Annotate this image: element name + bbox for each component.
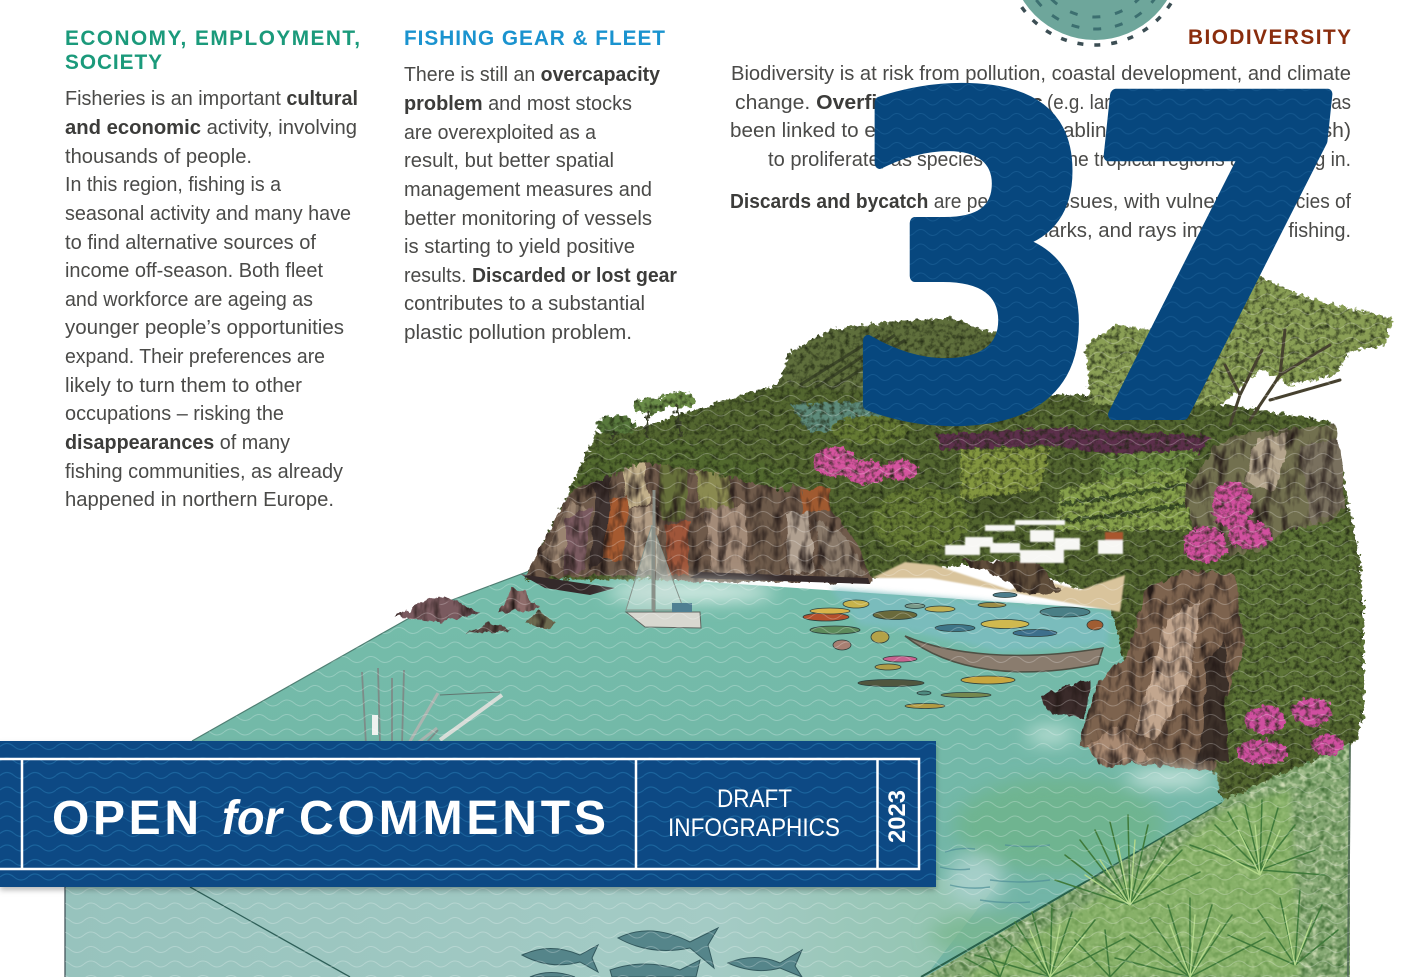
text block: economy column: thousands of people. (65, 145, 252, 168)
heading: biodiversity: BIODIVERSITY (1188, 26, 1351, 49)
moored boats (803, 592, 1103, 708)
text block: fishing gear column: plastic pollution problem. (404, 321, 632, 344)
beach (872, 562, 1125, 612)
banner title: OPEN (52, 792, 199, 845)
text block: fishing gear column: contributes to a substantial (404, 292, 645, 315)
fish school (522, 928, 802, 977)
right foliage (1230, 520, 1364, 735)
text block: fishing gear column: management measures and (404, 178, 652, 201)
green cliff top (570, 438, 800, 492)
big number 37: 7 (1045, 8, 1367, 518)
sailboat (626, 490, 701, 628)
hill vineyard stripes (800, 335, 905, 390)
seagrass meadow (925, 735, 1350, 977)
text block: biodiversity column: the tropical regions are moving in. (1062, 148, 1351, 171)
breakwater (905, 636, 1103, 672)
pink flowers upper (813, 447, 918, 484)
text block: economy column: to find alternative sources of (65, 231, 316, 254)
land mass (525, 385, 1364, 800)
banner title: for (222, 792, 284, 845)
text block: fishing gear column (404, 63, 677, 344)
wave texture overlay (65, 272, 1390, 977)
front water face (65, 880, 1000, 977)
text block: economy column: In this region, fishing is a (65, 173, 282, 196)
heading: economy, employment, society (65, 27, 360, 74)
text block: economy column: younger people’s opportunities (65, 316, 344, 339)
heading: fishing gear and fleet: FISHING GEAR & FLEET (404, 27, 665, 50)
shore rocks by beach (960, 560, 1060, 596)
text block: fishing gear column: results. Discarded or lost gear (404, 264, 677, 287)
small rocks in sea (396, 588, 556, 634)
banner subtitle: INFOGRAPHICS (668, 814, 840, 842)
right cliff rocks upper (1185, 425, 1345, 560)
text block: biodiversity column: Biodiversity is at risk from pollution, coastal development, and climate (731, 62, 1351, 85)
text block: biodiversity column: species native to (917, 148, 1062, 171)
banner year: 2023 (884, 790, 911, 843)
text block: fishing gear column: better monitoring of vessels (404, 207, 652, 230)
text block: fishing gear column: There is still an overcapacity (404, 63, 661, 86)
left headland trees (596, 392, 696, 440)
text block: biodiversity column: issues, with vulnerable (1055, 190, 1260, 213)
text block: fishing gear column: are overexploited as a (404, 121, 597, 144)
text block: economy column: and economic activity, involving (65, 116, 357, 139)
block edges (65, 803, 1222, 977)
text block: biodiversity column: been linked to explosions of prey, (730, 119, 1035, 142)
shore shadow (520, 572, 870, 595)
fishing boat wreck (362, 668, 502, 750)
teal hillside patch (790, 400, 880, 432)
left cliff rocks (525, 445, 872, 582)
text block: biodiversity column: others (such as jellyfish) (1124, 119, 1351, 142)
tree trunk and branches (1225, 330, 1340, 425)
banner subtitle: DRAFT (717, 785, 792, 813)
text block: economy column: happened in northern Europe. (65, 488, 334, 511)
text block: fishing gear column: problem and most stocks (404, 92, 632, 115)
sea surface (190, 570, 1260, 977)
text block: economy column (65, 87, 358, 511)
sea ripples (940, 845, 1050, 903)
green shallows (930, 777, 1165, 957)
banner: open for comments (0, 741, 936, 887)
heading: economy, employment, society: SOCIETY (65, 51, 162, 74)
mid foliage patches (830, 416, 1030, 552)
big number 37: 3 (843, 9, 1104, 518)
back hill (775, 318, 1010, 400)
text block: biodiversity column: (e.g. large predators like sharks) has (1047, 91, 1351, 114)
big number 37 (843, 8, 1367, 518)
illustration: coastal scene (65, 272, 1392, 977)
text block: economy column: likely to turn them to other (65, 374, 302, 397)
text block: economy column: and workforce are ageing as (65, 288, 313, 311)
banner title (52, 792, 606, 845)
text block: economy column: seasonal activity and many have (65, 202, 351, 225)
text block: biodiversity column: change. Overfishing of species (735, 91, 1043, 114)
text block: biodiversity column: by fishing. (1262, 219, 1351, 242)
text block: biodiversity column: turtles, sharks, and rays impacted (960, 219, 1265, 242)
text block: biodiversity column (730, 62, 1351, 242)
pink flowers right (1183, 481, 1272, 563)
heading: economy, employment, society: ECONOMY, EMPLOYMENT, (65, 27, 360, 50)
text block: economy column: disappearances of many (65, 431, 291, 454)
foam along shore (605, 583, 1215, 785)
text block: economy column: expand. Their preferences are (65, 345, 325, 368)
text block: biodiversity column: species of (1265, 190, 1351, 213)
text block: economy column: income off-season. Both fleet (65, 259, 323, 282)
right cliff lower (1040, 570, 1245, 770)
white village (945, 520, 1123, 563)
purple vineyard band (936, 428, 1210, 455)
top circle illustration (1005, 0, 1185, 45)
sea edge line (192, 570, 532, 741)
banner title: COMMENTS (299, 792, 606, 845)
text block: fishing gear column: result, but better spatial (404, 149, 614, 172)
text block: economy column: fishing communities, as already (65, 460, 344, 483)
pink flowers lower (1236, 698, 1344, 764)
text block: economy column: occupations – risking the (65, 402, 284, 425)
terraced fields (960, 448, 1200, 530)
text block: biodiversity column: enabling (1040, 119, 1118, 142)
inner harbour water (830, 588, 1110, 652)
text block: fishing gear column: is starting to yield positive (404, 235, 635, 258)
banner subtitle (668, 785, 840, 842)
text block: economy column: Fisheries is an important cultural (65, 87, 358, 110)
right tree crown (1085, 272, 1392, 405)
banner frame (0, 759, 919, 869)
text block: biodiversity column: to proliferate, as (768, 148, 912, 171)
text block: biodiversity column: Discards and bycatch are persistent (730, 190, 1050, 213)
